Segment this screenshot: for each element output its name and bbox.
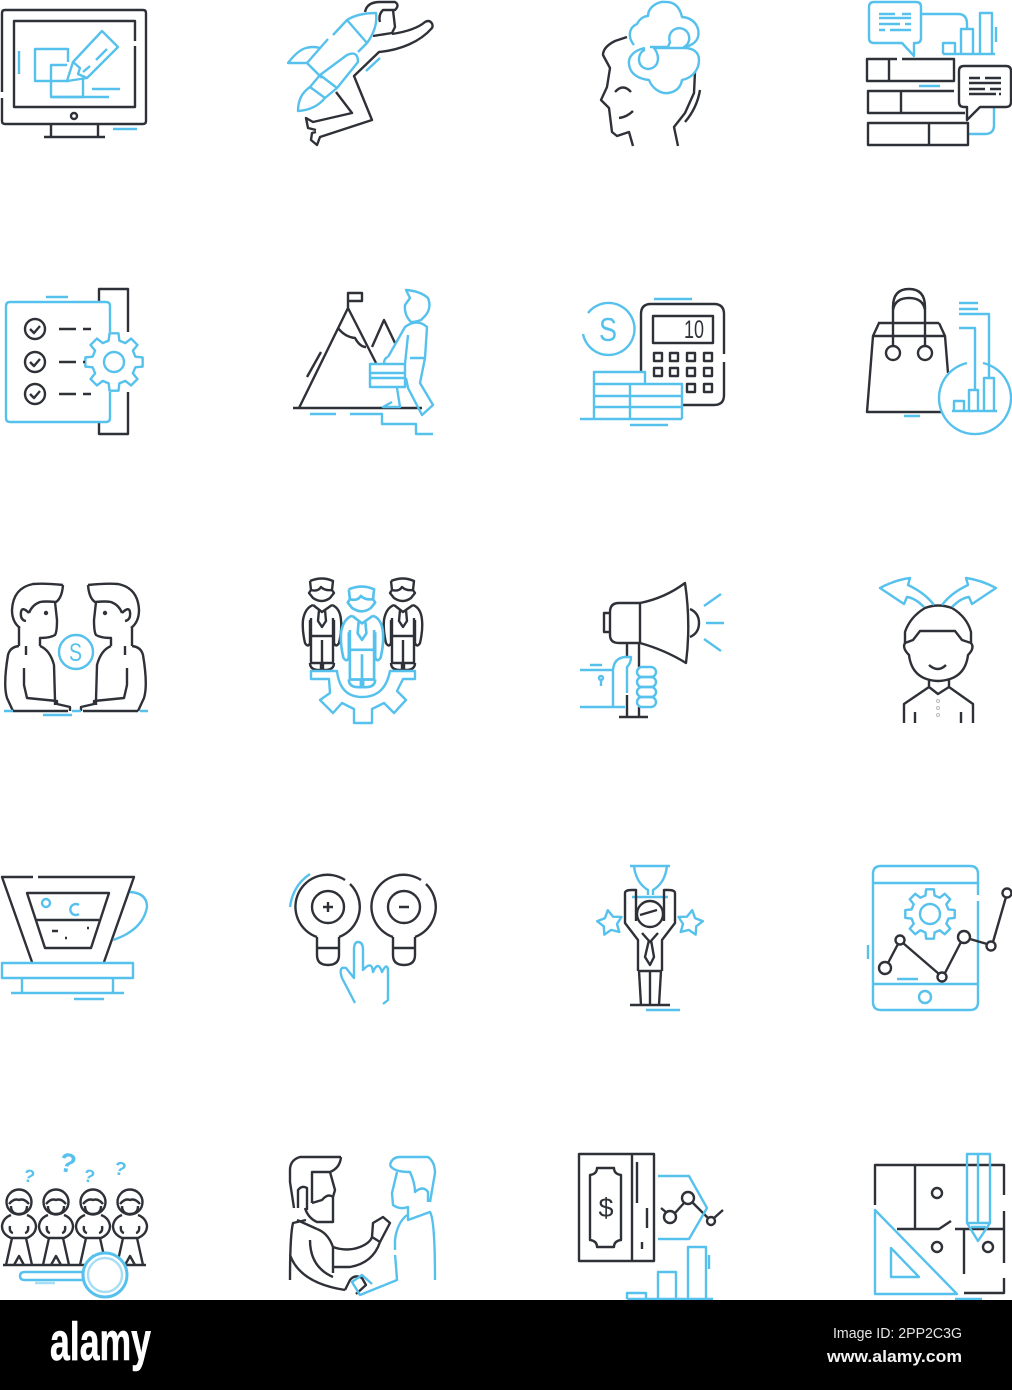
icon: plus and minus bulbs with pointing hand	[290, 874, 436, 1004]
icon: coffee cup	[2, 877, 147, 999]
icon: shopping bag with chart	[867, 289, 1011, 434]
icon: people with question marks and magnifier	[2, 1147, 147, 1297]
icon: chat bubbles, bars and bricks	[867, 2, 1011, 145]
icon: two men with dollar coin	[4, 584, 148, 715]
display digits: 10	[684, 316, 704, 344]
icon: megaphone in hand	[580, 583, 724, 717]
icon: floor plan with pencil and set square	[875, 1154, 1004, 1299]
icon: banknote with hexagon and bars	[579, 1154, 723, 1299]
icon: person choosing between arrows	[880, 578, 996, 723]
question marks: ?	[22, 1165, 37, 1187]
question marks: ?	[112, 1158, 128, 1181]
image id: Image ID: 2PP2C3G	[833, 1325, 962, 1342]
dollar sign: $	[598, 1193, 614, 1223]
icon: man flying with rocket	[288, 2, 433, 145]
question marks: ?	[82, 1165, 97, 1187]
icon: monitor with design tool	[2, 10, 146, 137]
footer band	[0, 1300, 1012, 1390]
icon: bearded man and client shaking hands	[290, 1157, 435, 1295]
icon: checklist with gear	[6, 289, 143, 434]
question marks	[22, 1147, 128, 1187]
icon: climbing mountain with briefcase	[293, 290, 433, 434]
icon: head with puzzle cloud	[601, 2, 700, 146]
icon: tablet with gear and line chart	[868, 866, 1012, 1010]
question marks: ?	[57, 1147, 79, 1180]
icon: team on a gear	[303, 578, 422, 723]
alamy logo: alamy	[50, 1312, 151, 1372]
website: www.alamy.com	[826, 1348, 962, 1366]
icon: calculator with coins	[580, 299, 724, 425]
dollar sign: S	[599, 311, 617, 348]
dollar sign: S	[69, 639, 82, 667]
icon: businessman holding trophy	[596, 866, 704, 1010]
